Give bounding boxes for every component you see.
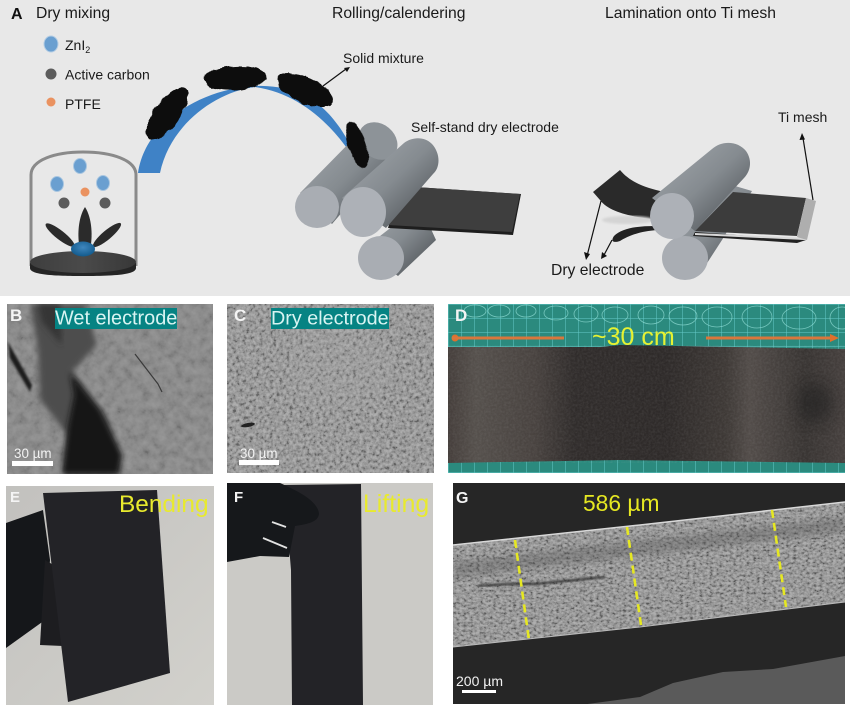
label: dry electrode: Dry electrode (271, 308, 389, 330)
scale bar: 30 µm (12, 448, 53, 466)
panel letter G: G (456, 490, 468, 507)
rollers: calendering (295, 114, 521, 280)
panel letter E: E (10, 489, 20, 506)
label: dry electrode with arrows: Dry electrode (551, 262, 645, 279)
label: self-stand dry electrode: Self-stand dry electrode (411, 119, 559, 135)
back flap (40, 560, 63, 646)
electrode cross-section (453, 502, 845, 647)
label: lifting: Lifting (363, 491, 429, 518)
panel letter C: C (234, 306, 246, 325)
scale bar: 30 µm: 30 µm (14, 446, 52, 461)
panel B: wet electrode SEM (7, 304, 213, 474)
scale bar: 30 µm: 30 µm (240, 446, 278, 461)
dry electrode: lower curl (612, 226, 658, 242)
label: Ti mesh (778, 109, 827, 200)
solid mixture clusters (138, 64, 338, 147)
scale bar: 30 µm (239, 448, 279, 465)
panel D: 30 cm electrode photo (448, 304, 850, 473)
scale bar: 200 µm: 200 µm (456, 673, 503, 689)
panel E: bending photo (6, 486, 214, 705)
label: 586 µm: 586 µm (583, 490, 660, 516)
sheet: self-standing dry electrode (388, 186, 521, 235)
heading: lamination: Lamination onto Ti mesh (605, 5, 776, 22)
bent sheet (43, 490, 170, 702)
rollers: lamination (593, 143, 816, 280)
panel C: dry electrode SEM (227, 304, 434, 473)
panel A: fabrication schematic (0, 0, 850, 296)
length arrows (452, 334, 839, 342)
sheet and Ti mesh (693, 232, 806, 243)
label: bending: Bending (119, 491, 209, 518)
blob on rollers (341, 119, 373, 171)
legend: materials (44, 36, 150, 112)
glove (6, 510, 50, 648)
legend: materials: ZnI (65, 37, 85, 53)
lifted sheet (284, 484, 363, 705)
label: Ti mesh: Ti mesh (778, 109, 827, 125)
arc: blue material stream (138, 86, 363, 174)
legend: materials: Active carbon (65, 66, 150, 82)
glove (227, 483, 319, 562)
icon: mixing chamber (30, 152, 136, 276)
panel F: lifting photo (227, 483, 433, 705)
label: solid mixture: Solid mixture (343, 50, 424, 66)
heading: rolling: Rolling/calendering (332, 5, 465, 22)
dry electrode: upper curved sheet (593, 170, 665, 220)
legend: materials: PTFE (65, 96, 101, 112)
lower substrate (580, 656, 845, 705)
panel letter B: B (10, 306, 22, 325)
panel letter A: A (11, 6, 23, 23)
panel letter F: F (234, 489, 243, 506)
label: dry electrode with arrows (551, 201, 645, 279)
electrode sheet (448, 345, 845, 463)
legend: materials: 2 (85, 45, 90, 55)
heading: dry mixing: Dry mixing (36, 5, 110, 22)
panel letter D: D (455, 306, 467, 325)
label: solid mixture (323, 50, 424, 86)
label: ~30 cm: ~30 cm (592, 323, 675, 351)
panel G: cross-section SEM (453, 483, 845, 705)
thickness dashes (515, 510, 786, 640)
scale bar: 200 µm (456, 676, 502, 693)
label: wet electrode: Wet electrode (55, 308, 177, 330)
